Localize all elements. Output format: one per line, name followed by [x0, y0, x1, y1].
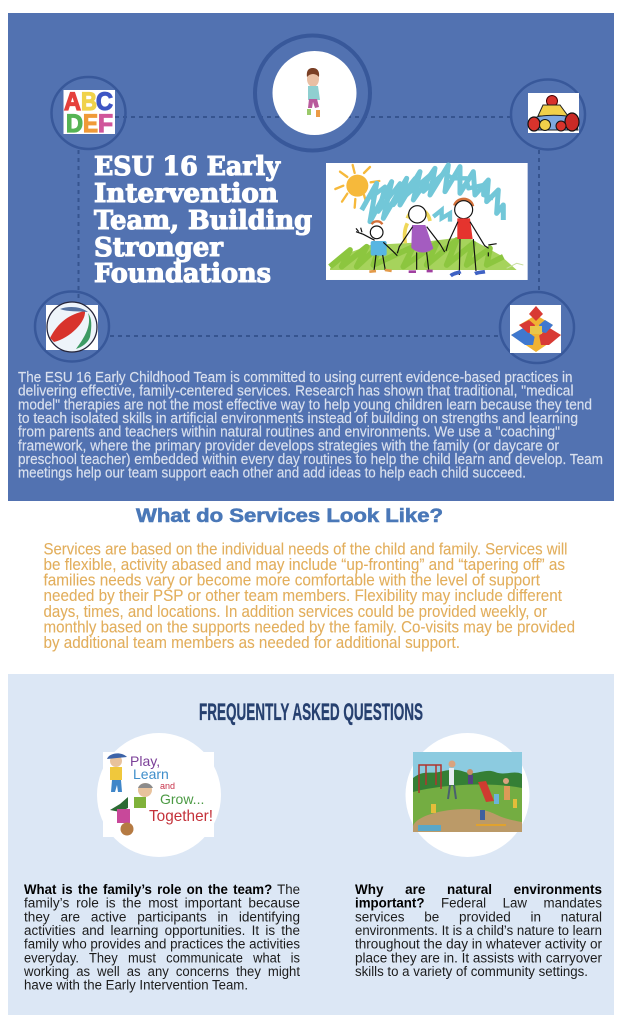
question: natural environments: services be provided in natural [355, 909, 602, 924]
icon: alphabet letters: B [81, 88, 97, 116]
services paragraph: needed by their PSP or other team members. Flexibility may include different [44, 587, 562, 605]
question: natural environments: place they are in. It assists with carryover [355, 950, 603, 965]
question: natural environments: throughout the day in whatever activity or [355, 937, 603, 952]
question: natural environments: important? Federal Law mandates [355, 896, 602, 911]
image: play learn and grow together: Grow... [160, 791, 204, 807]
services paragraph: be flexible, activity abased and may include “up-fronting” and “tapering off” as [44, 556, 565, 574]
icon: beach ball [35, 292, 109, 362]
heading: what do services look like: What do Services Look Like? [136, 506, 443, 527]
services paragraph: families needs vary or become more comfortable with the level of support [44, 572, 540, 590]
question: natural environments [355, 882, 603, 979]
child [356, 221, 397, 272]
intro paragraph: from parents and teachers within natural routines and environments. We use a "coaching" [18, 425, 560, 441]
image: play learn and grow together: Together! [149, 808, 213, 825]
icon: alphabet letters: E [83, 110, 98, 138]
panel: header background [8, 13, 614, 501]
title: Team, Building [94, 206, 312, 236]
question: family's role: What is the family’s role on the team? The [24, 882, 300, 897]
icon: toy car [511, 80, 585, 150]
father [446, 199, 497, 276]
title: Foundations [94, 259, 271, 289]
panel: frequently asked questions background [8, 674, 614, 1015]
image: play learn and grow together: Play, [130, 753, 160, 769]
family drawing [326, 163, 528, 280]
services paragraph: by additional team members as needed for additional support. [44, 634, 460, 652]
icon: top circle with toddler [255, 36, 370, 150]
heading: frequently asked questions: FREQUENTLY ASKED QUESTIONS [199, 699, 423, 726]
mother [397, 206, 445, 272]
intro paragraph [18, 370, 603, 482]
question: family's role: have with the Early Intervention Team. [24, 978, 248, 993]
image: play learn and grow together: and [160, 781, 175, 791]
question: family's role: everyday. They must communicate what is [24, 950, 300, 965]
services paragraph: monthly based on the supports needed by the family. Co-visits may be provided [44, 618, 575, 636]
icon: alphabet letters: F [98, 110, 113, 138]
question: family's role [23, 882, 300, 993]
image: playground [406, 733, 530, 857]
question: natural environments: environments. It is a child’s nature to learn [355, 923, 602, 938]
intro paragraph: to teach isolated skills in artificial environments instead of building on strengths and learning [18, 411, 578, 427]
intro paragraph: delivering effective, family-centered services. Research has shown that traditional, "medical [18, 384, 574, 400]
intro paragraph: meetings help our team support each other and add ideas to help each child succeed. [18, 466, 526, 482]
intro paragraph: The ESU 16 Early Childhood Team is committed to using current evidence-based practices in [18, 370, 572, 386]
image: play learn and grow together: Learn [133, 766, 169, 782]
icon: alphabet letters: C [96, 88, 113, 116]
question: family's role: family’s role is the most important because [24, 896, 300, 911]
icon: alphabet letters [52, 77, 126, 149]
icon: building blocks [500, 292, 574, 363]
grass scribble [330, 237, 517, 270]
intro paragraph: framework, where the primary provider develops strategies with the family (or daycare or [18, 438, 559, 454]
question: family's role: family who provides and practices the activities [24, 937, 300, 952]
dashed connector frame [78, 117, 539, 336]
icon: alphabet letters: D [66, 110, 83, 138]
services paragraph [44, 540, 575, 652]
question: family's role: they are active participants in identifying [24, 909, 300, 924]
title: ESU 16 Early [94, 152, 281, 182]
question: natural environments: Why are natural environments [355, 882, 602, 897]
question: family's role: working as well as any concerns they might [23, 964, 300, 979]
title [94, 152, 312, 289]
title: Intervention [94, 179, 278, 209]
question: family's role: activities and learning opportunities. It is the [24, 923, 300, 938]
image: play learn and grow together [97, 733, 221, 857]
services paragraph: days, times, and locations. In addition services could be provided weekly, or [44, 603, 547, 621]
sky scribble [362, 165, 503, 222]
question: natural environments: skills to a variety of community settings. [355, 964, 588, 979]
intro paragraph: model" therapies are not the most effective way to help young children learn because they tend [18, 397, 592, 413]
title: Stronger [94, 233, 223, 263]
services paragraph: Services are based on the individual needs of the child and family. Services will [44, 540, 568, 558]
sun [335, 165, 379, 208]
icon: alphabet letters: A [64, 88, 81, 116]
